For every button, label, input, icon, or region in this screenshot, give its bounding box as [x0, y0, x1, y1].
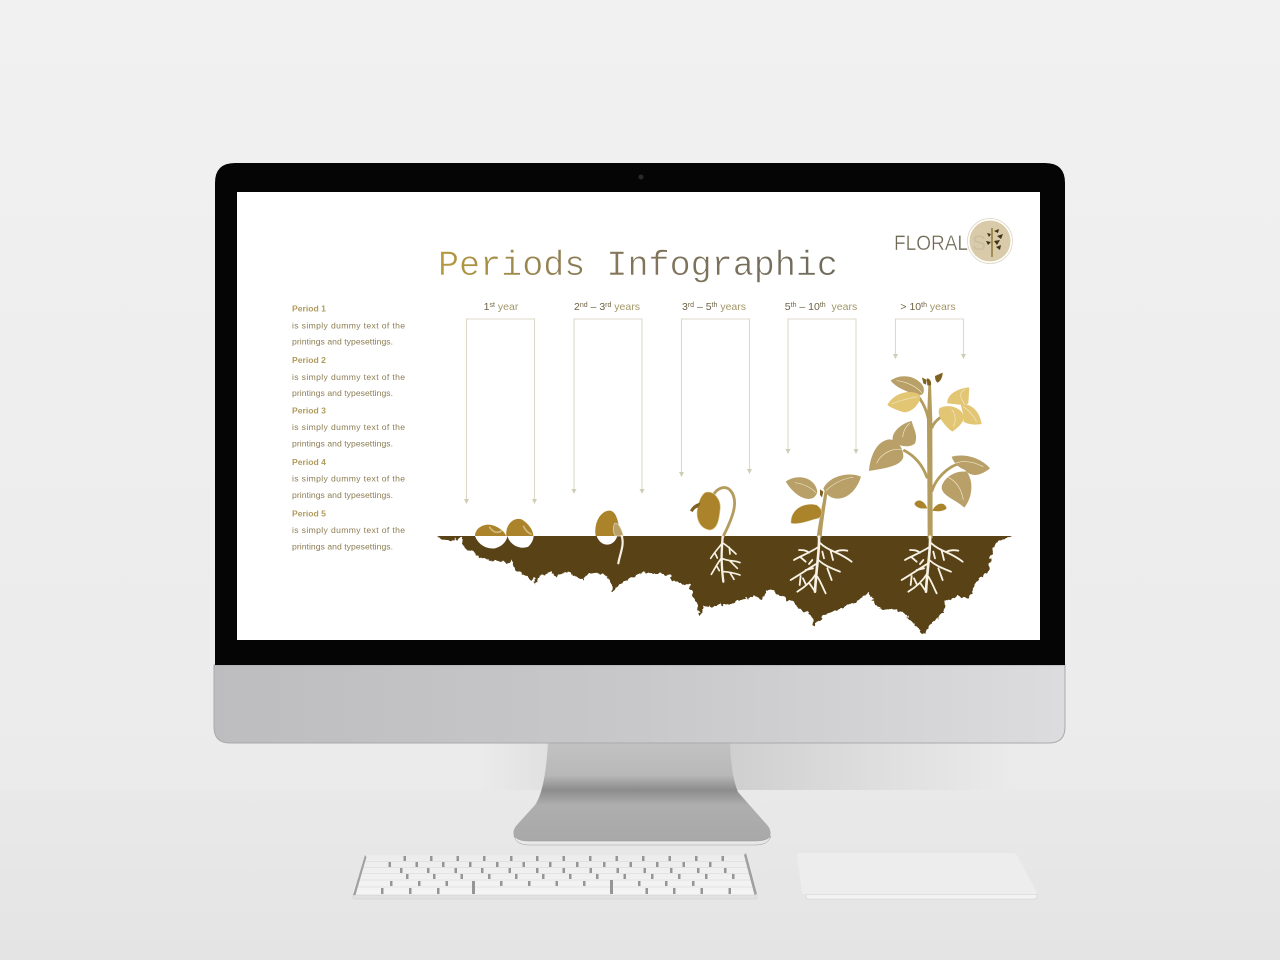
plant stage 4: young plant — [786, 474, 861, 593]
veins — [795, 477, 853, 493]
stand shadow on wall — [480, 743, 1020, 790]
roots — [791, 537, 852, 593]
screen — [237, 192, 1040, 640]
trackpad — [797, 853, 1037, 899]
monitor chin — [214, 665, 1065, 743]
logo: FLORAL — [894, 232, 968, 255]
bracket arrows — [464, 319, 966, 504]
period 5 text: is simply dummy text of the — [292, 525, 405, 535]
period 4 text: is simply dummy text of the — [292, 474, 405, 484]
cotyledons — [914, 500, 947, 511]
label: 3rd to 5th years: – 5 — [694, 301, 712, 313]
webcam — [638, 174, 644, 180]
leaf left — [786, 477, 817, 499]
leaves yellow — [887, 387, 982, 432]
period 1 text — [292, 304, 405, 346]
label: 3rd to 5th years: years — [717, 301, 746, 313]
key gaps — [381, 856, 734, 894]
title: Periods Infographic — [438, 246, 838, 286]
period 5 text — [292, 508, 405, 552]
keyboard — [353, 853, 757, 899]
period 3 text — [292, 406, 405, 448]
period 1 text: is simply dummy text of the — [292, 320, 405, 330]
label: 2nd to 3rd years: nd — [580, 302, 588, 309]
buds — [922, 373, 943, 385]
keyboard side edges — [353, 853, 757, 895]
logo — [894, 218, 1012, 264]
period 5 text: Period 5 — [292, 508, 326, 518]
arrow: period 4 — [786, 319, 858, 454]
seed leaf — [791, 504, 822, 524]
period 3 text: is simply dummy text of the — [292, 422, 405, 432]
desk surface — [0, 790, 1280, 960]
monitor bezel — [215, 163, 1065, 665]
period 2 text: Period 2 — [292, 355, 326, 365]
label: 2nd to 3rd years: years — [611, 301, 640, 313]
label: over 10th years: th — [921, 302, 927, 309]
plant stage 1: seeds — [475, 519, 534, 548]
period 1 text: printings and typesettings. — [292, 336, 393, 346]
label: over 10th years: > 10 — [900, 301, 921, 313]
year labels — [484, 301, 956, 313]
period 2 text: is simply dummy text of the — [292, 372, 405, 382]
period 4 text: printings and typesettings. — [292, 490, 393, 500]
roots — [902, 537, 963, 593]
label: 1st year: st — [490, 302, 495, 309]
monitor — [214, 163, 1065, 845]
label: 2nd to 3rd years: rd — [605, 302, 611, 309]
logo: S — [972, 232, 986, 255]
period 2 text: printings and typesettings. — [292, 388, 393, 398]
soil — [438, 530, 1013, 635]
label: 5th to 10th years: years — [826, 301, 857, 313]
period 1 text: Period 1 — [292, 304, 326, 314]
period descriptions — [292, 304, 405, 552]
seed left — [475, 525, 507, 548]
period 3 text: printings and typesettings. — [292, 438, 393, 448]
veins — [877, 381, 983, 500]
label: 2nd to 3rd years: – 3 — [588, 301, 605, 313]
period 4 text — [292, 457, 405, 500]
label: 1st year: year — [495, 301, 519, 313]
label: 3rd to 5th years: rd — [688, 302, 694, 309]
label: 2nd to 3rd years: 2 — [574, 301, 580, 313]
plant stage 2: germinating seed — [595, 511, 623, 563]
period 2 text — [292, 355, 405, 398]
leaf right — [823, 474, 861, 499]
label: 5th to 10th years: th — [791, 302, 797, 309]
monitor stand — [513, 743, 771, 845]
period 5 text: printings and typesettings. — [292, 542, 393, 552]
label: 5th to 10th years: th — [820, 302, 826, 309]
period 4 text: Period 4 — [292, 457, 326, 467]
label: 1st year: 1 — [484, 301, 490, 313]
label: over 10th years: years — [927, 301, 956, 313]
bud — [820, 489, 823, 497]
plant stage 3: sprout — [690, 488, 740, 582]
label: 3rd to 5th years: th — [712, 302, 718, 309]
label: 5th to 10th years: 5 — [785, 301, 791, 313]
stem — [927, 385, 933, 538]
plant stage 5: mature plant — [869, 373, 990, 593]
arrow: period 5 — [893, 319, 966, 359]
arrow: period 1 — [464, 319, 537, 504]
label: 3rd to 5th years: 3 — [682, 301, 688, 313]
period 3 text: Period 3 — [292, 406, 326, 416]
arrow: period 3 — [679, 319, 752, 477]
arrow: period 2 — [572, 319, 644, 494]
key rows — [355, 862, 755, 887]
label: 5th to 10th years: – 10 — [796, 301, 820, 313]
leaves tan — [869, 376, 990, 508]
seed right — [506, 519, 534, 548]
